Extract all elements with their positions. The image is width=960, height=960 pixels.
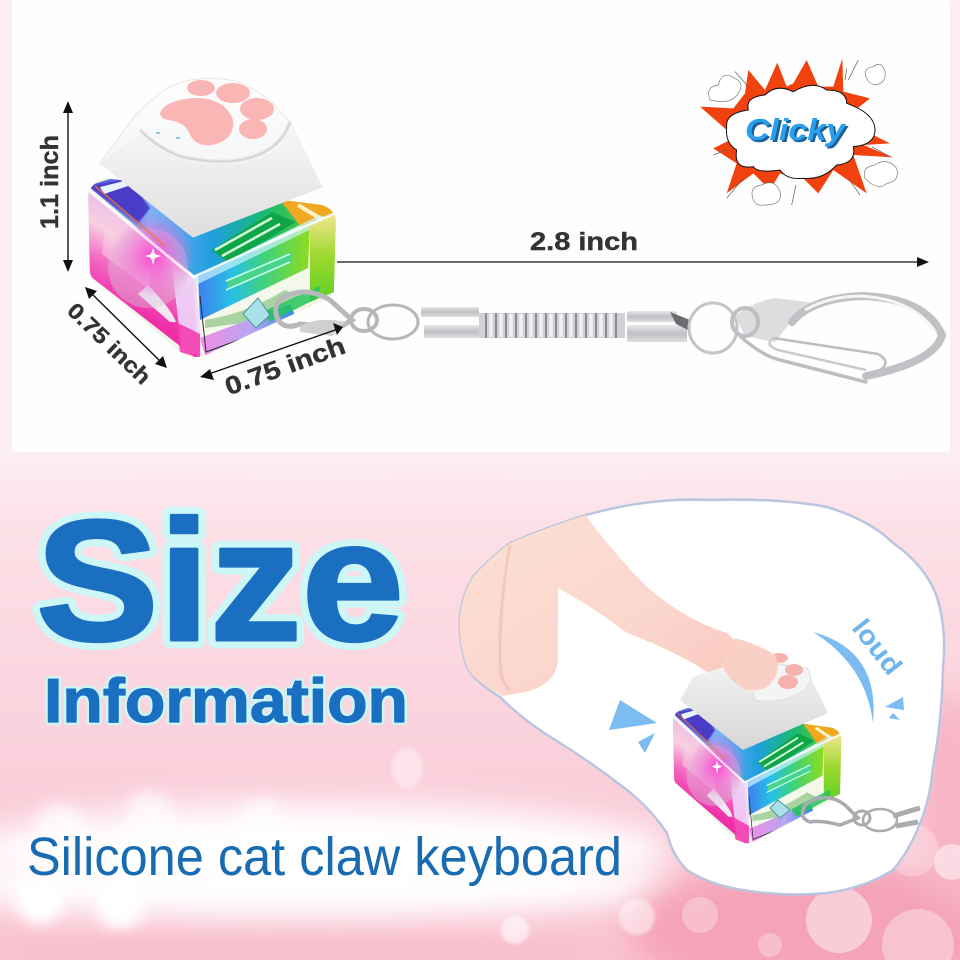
keychain product: top (80, 79, 942, 382)
dimension: depth 0.75 inch (62, 287, 167, 389)
dimension: height 1.1 inch (36, 101, 73, 272)
spring (479, 313, 625, 338)
subheading: Information: Information (44, 667, 408, 736)
subheading: Information: Information (44, 667, 408, 736)
second keychain cube body (667, 686, 848, 849)
lobster clasp (243, 292, 352, 336)
paw pads (160, 80, 274, 145)
burst spikes (700, 58, 893, 193)
second keycap with paw (680, 638, 828, 750)
clicky label: Clicky (747, 115, 849, 149)
dimension: depth 0.75 inch: 0.75 inch (62, 298, 156, 389)
icon: clicky comic burst (700, 58, 897, 205)
dimension: width 0.75 inch: 0.75 inch (221, 332, 349, 401)
panel: white blob with usage photo (460, 500, 944, 894)
second clasp and chain (770, 798, 920, 831)
dimension: length 2.8 inch: 2.8 inch (530, 228, 638, 256)
bokeh cloud background (0, 690, 960, 960)
fingertip (722, 638, 778, 690)
small clouds (709, 64, 897, 205)
dimension: length 2.8 inch (337, 228, 929, 267)
clicky label: Clicky (745, 113, 847, 147)
panel: white product photo area (12, 0, 950, 452)
heading: Size: Size (36, 485, 404, 677)
loud label: loud (846, 613, 908, 681)
paw pads (770, 653, 803, 689)
keychain cube body (80, 150, 345, 365)
speed lines (713, 60, 890, 205)
keycap with paw (100, 79, 322, 237)
hook (732, 296, 942, 382)
speech cloud (726, 85, 875, 179)
caption: Silicone cat claw keyboard: Silicone cat claw keyboard (27, 827, 622, 887)
chain: rings, spring and hook (351, 296, 942, 382)
dimension: height 1.1 inch: 1.1 inch (36, 135, 64, 229)
heading: Size: Size (36, 485, 404, 677)
dimension: width 0.75 inch (200, 323, 349, 401)
sound wave arcs and triangles (609, 632, 904, 753)
hand and pressing finger (460, 515, 760, 696)
